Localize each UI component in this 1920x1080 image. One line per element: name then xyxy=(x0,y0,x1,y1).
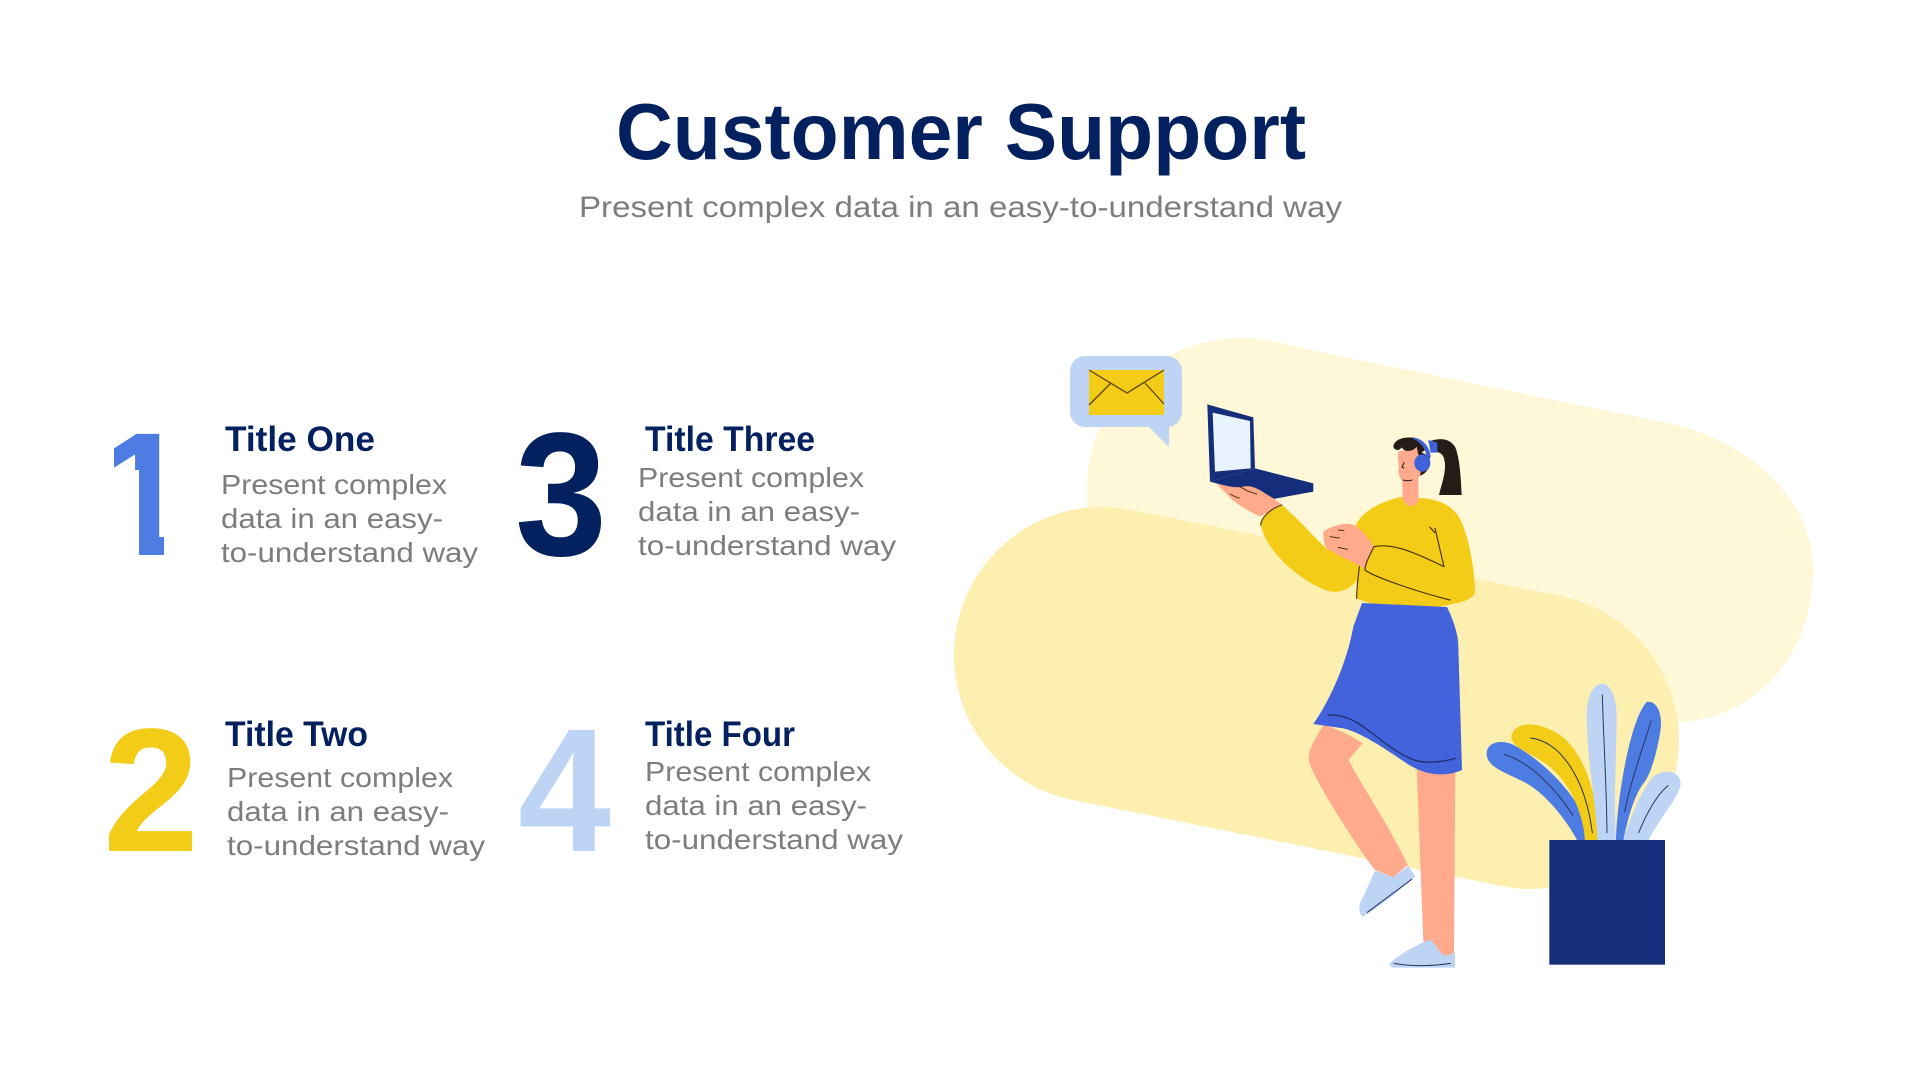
figure: upper body xyxy=(1207,404,1475,608)
text block: item one xyxy=(221,469,478,568)
hand under laptop xyxy=(1217,483,1283,517)
head and neck xyxy=(1398,447,1421,506)
panel: item four xyxy=(518,693,903,889)
title: Customer Support xyxy=(616,87,1306,176)
sweater xyxy=(1261,497,1475,608)
text block: item four: data in an easy- xyxy=(645,790,867,821)
subtitle: Present complex data in an easy-to-understand way xyxy=(579,191,1342,224)
face details xyxy=(1402,463,1412,481)
background blob: light xyxy=(1087,338,1813,723)
text block: item two xyxy=(227,762,485,861)
text block: item two: Present complex xyxy=(227,762,453,793)
standing leg xyxy=(1417,767,1455,956)
text block: item four: to-understand way xyxy=(645,824,903,855)
hair fringe xyxy=(1393,437,1425,455)
panel: item three xyxy=(515,397,896,593)
sweater fold lines xyxy=(1261,505,1450,600)
bent leg xyxy=(1309,725,1408,877)
text block: item four xyxy=(645,756,903,855)
heading: Title Two: Title Two xyxy=(225,715,368,754)
text block: item one: to-understand way xyxy=(221,537,478,568)
icon: speech bubble with envelope xyxy=(1070,356,1182,447)
number 2: 2 xyxy=(103,693,199,889)
number 4: 4 xyxy=(518,693,611,889)
text block: item one: Present complex xyxy=(221,469,447,500)
number 3: 3 xyxy=(515,397,607,593)
number 1: 1 xyxy=(94,397,192,593)
front shoe xyxy=(1390,939,1455,968)
text block: item three: to-understand way xyxy=(638,530,896,561)
slide canvas xyxy=(108,104,1813,968)
text block: item three xyxy=(638,462,896,561)
heading: Title Four: Title Four xyxy=(645,715,795,754)
laptop xyxy=(1207,404,1313,499)
skirt xyxy=(1313,603,1462,774)
heading: Title One: Title One xyxy=(225,420,375,459)
ponytail xyxy=(1428,439,1462,495)
background blob: dark xyxy=(1102,655,1531,741)
text block: item four: Present complex xyxy=(645,756,871,787)
panel: item one xyxy=(114,426,478,568)
text block: item three: data in an easy- xyxy=(638,496,860,527)
headset xyxy=(1413,438,1431,472)
illustration: customer support agent xyxy=(1070,338,1813,968)
text block: item three: Present complex xyxy=(638,462,864,493)
neck front xyxy=(1402,487,1418,506)
panel: item two xyxy=(103,693,485,889)
heading: Title Three: Title Three xyxy=(645,420,815,459)
plant leaves xyxy=(1487,684,1681,841)
text block: item one: data in an easy- xyxy=(221,503,443,534)
hair behind ear xyxy=(1417,450,1430,476)
text block: item two: data in an easy- xyxy=(227,796,449,827)
plant pot xyxy=(1549,840,1665,965)
hair tie xyxy=(1428,440,1437,453)
figure: lower body xyxy=(1309,603,1681,968)
back shoe xyxy=(1359,866,1415,916)
text block: item two: to-understand way xyxy=(227,830,485,861)
front hand xyxy=(1323,524,1373,569)
